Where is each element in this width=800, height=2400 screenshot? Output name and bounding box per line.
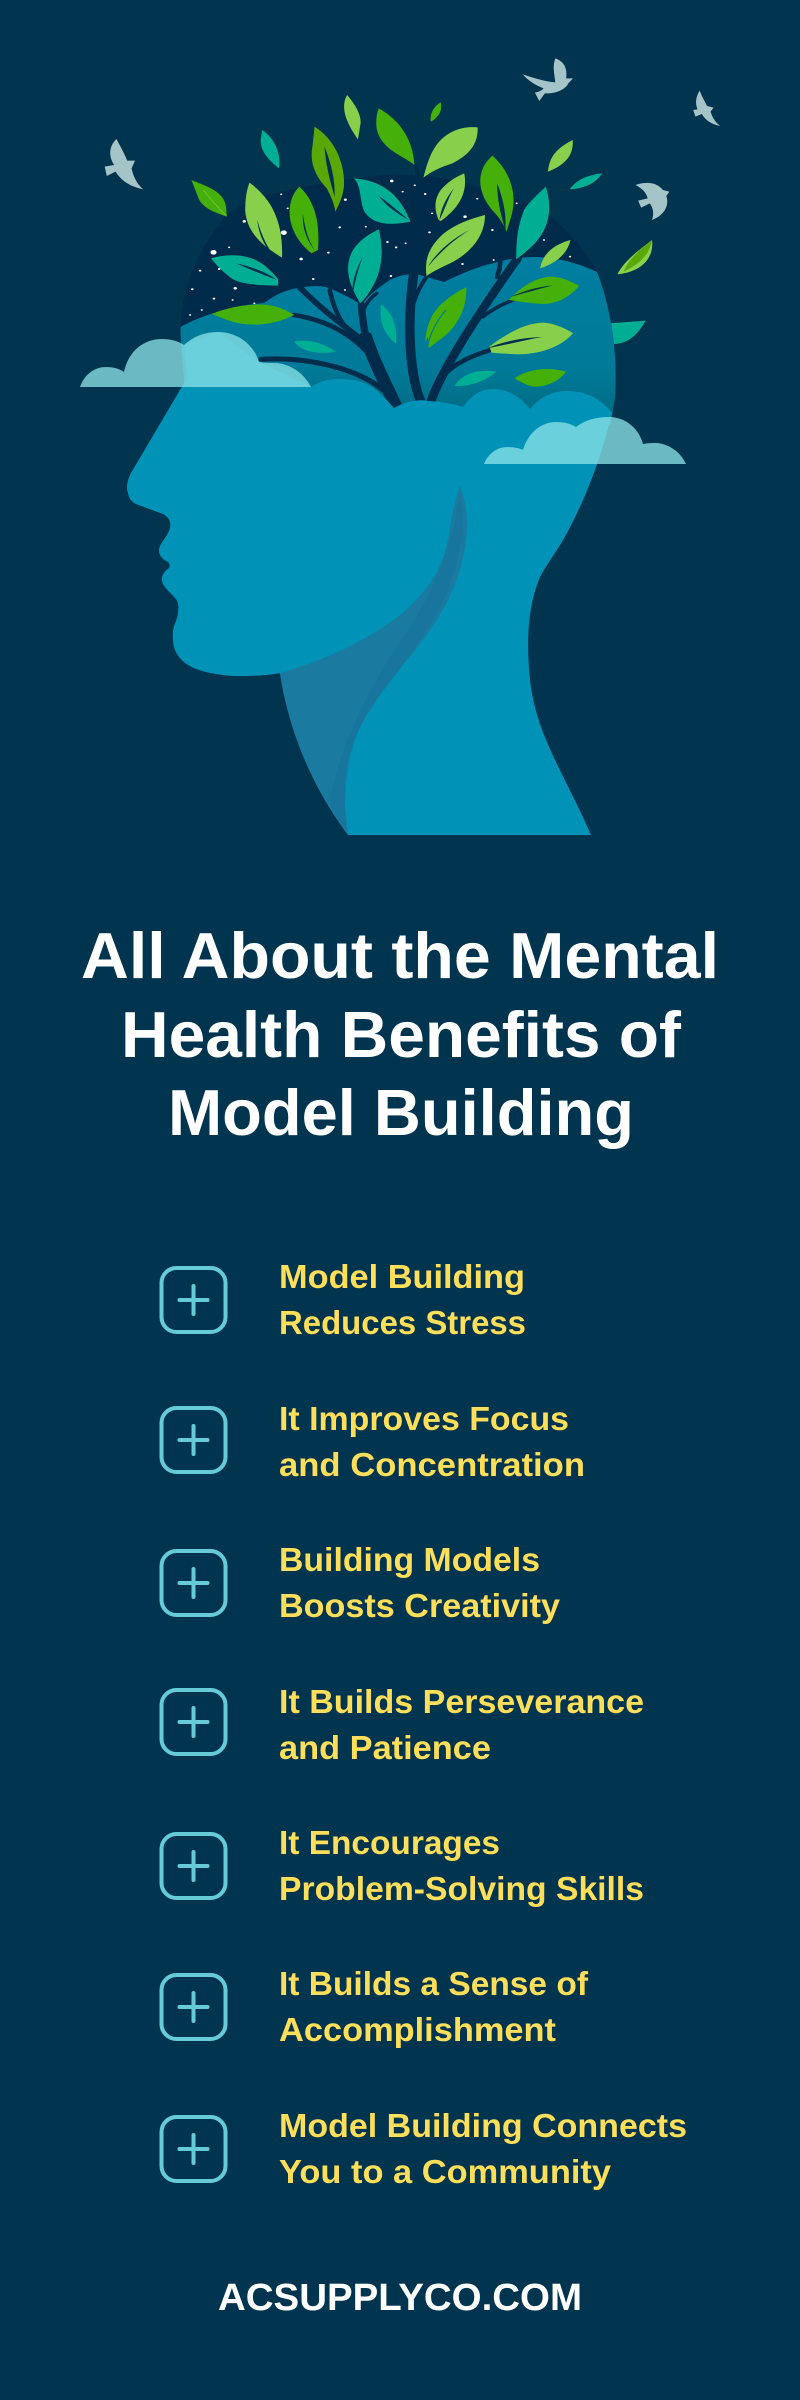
teal hills inside head [175, 257, 625, 430]
leaves [191, 95, 652, 387]
item 3 [162, 1541, 561, 1624]
cloud right [484, 417, 686, 464]
birds [105, 58, 720, 220]
title: All About the Mental [81, 919, 719, 992]
item 4: and Patience [279, 1729, 491, 1766]
item 3: Boosts Creativity [279, 1587, 561, 1624]
item 1 [162, 1258, 526, 1341]
benefits list [160, 1258, 687, 2190]
item 1: Model Building [279, 1258, 525, 1295]
tree branches [262, 166, 541, 407]
leaf behind head [611, 321, 645, 344]
item 1: Reduces Stress [279, 1304, 526, 1341]
title: Health Benefits of [121, 998, 681, 1071]
head and face silhouette [127, 332, 612, 835]
bird top right [523, 58, 573, 101]
illustration: head with tree [80, 58, 720, 835]
neck shadow [280, 485, 467, 835]
cloud left [80, 332, 311, 387]
item 5 [162, 1824, 644, 1907]
item 2 [162, 1400, 585, 1483]
stars [189, 180, 571, 316]
item 6 [162, 1965, 589, 2048]
title [81, 919, 719, 1149]
item 7: Model Building Connects [279, 2107, 687, 2144]
item 6: It Builds a Sense of [279, 1965, 589, 2002]
item 6: Accomplishment [279, 2011, 556, 2048]
item 5: Problem-Solving Skills [279, 1870, 644, 1907]
item 7 [162, 2107, 687, 2190]
item 2: It Improves Focus [279, 1400, 569, 1437]
item 4 [162, 1683, 644, 1766]
item 5: It Encourages [279, 1824, 500, 1861]
item 7: You to a Community [279, 2153, 612, 2190]
dark sky dome [181, 175, 616, 425]
title: Model Building [168, 1076, 634, 1149]
bird mid right [636, 183, 669, 220]
bird far right [693, 91, 720, 126]
item 2: and Concentration [279, 1446, 585, 1483]
item 4: It Builds Perseverance [279, 1683, 644, 1720]
bird left [105, 139, 143, 189]
footer website: ACSUPPLYCO.COM [218, 2277, 582, 2319]
item 3: Building Models [279, 1541, 540, 1578]
